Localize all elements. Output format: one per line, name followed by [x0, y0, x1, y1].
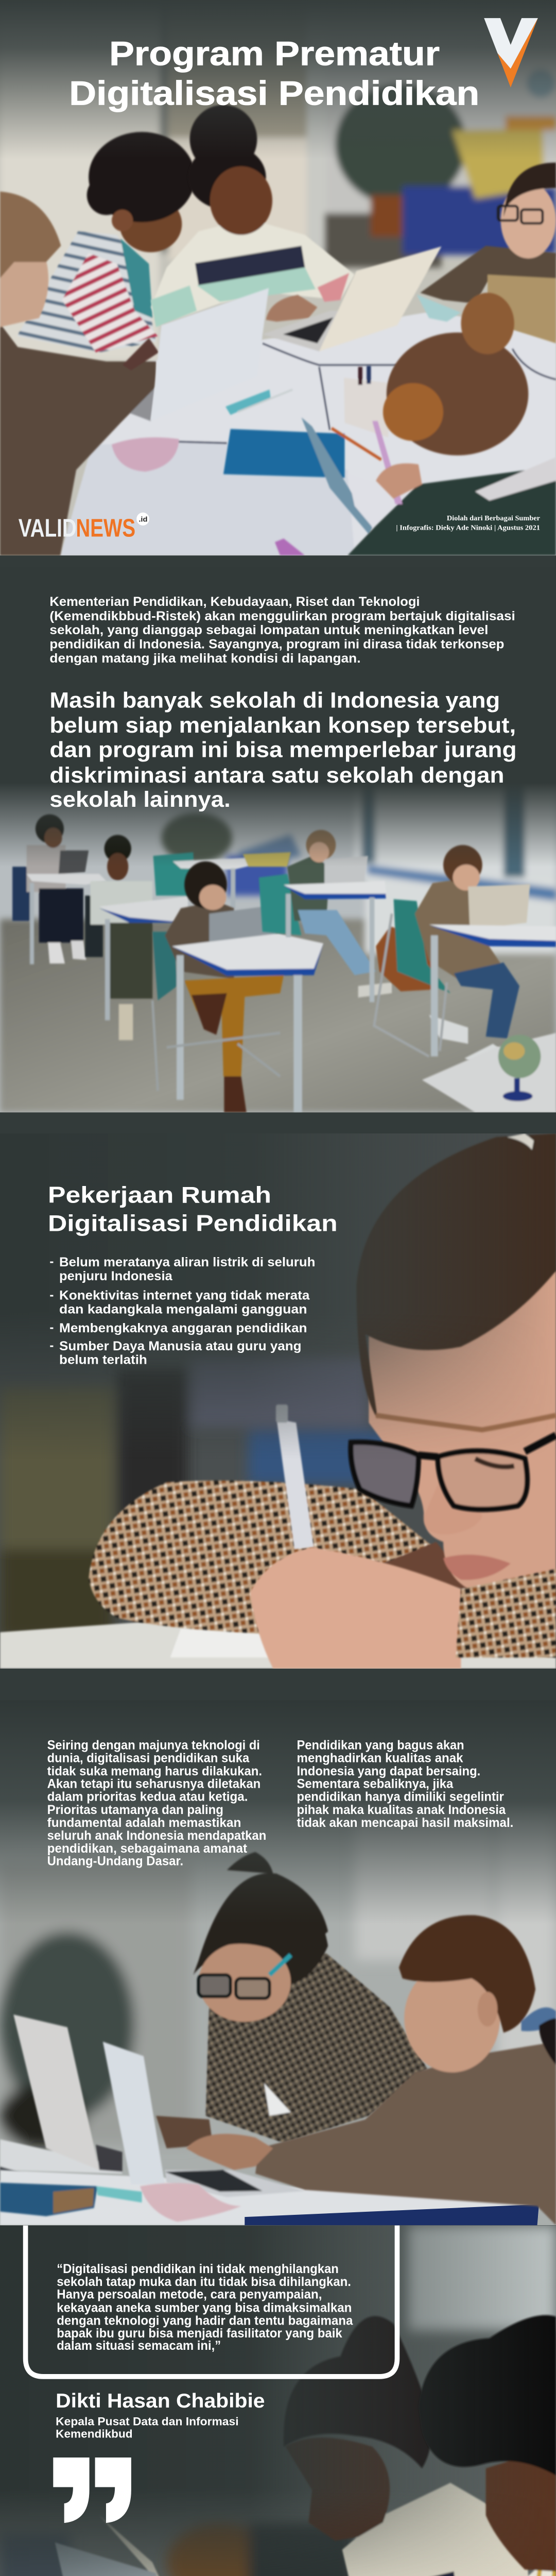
shadow under chin — [383, 1542, 475, 1590]
bullet list: Sumber Daya Manusia atau guru yang — [59, 1340, 301, 1353]
logo: VALIDNEWS.id — [19, 513, 149, 543]
front laptop — [103, 2042, 305, 2197]
left fade overlay — [0, 2226, 556, 2576]
left column text: Prioritas utamanya dan paling — [47, 1803, 223, 1817]
laptops — [55, 2515, 337, 2576]
desk items — [111, 364, 388, 555]
middle right student: girl with laptop — [259, 830, 392, 1002]
hero background room — [0, 54, 556, 361]
girl in striped sweater — [284, 2316, 528, 2576]
classroom background — [0, 675, 556, 1112]
panel: hero classroom photo with title — [0, 0, 556, 555]
hand — [250, 1547, 461, 1669]
left fade overlay — [0, 1133, 556, 1459]
right column text: pendidikan hanya dimiliki segelintir — [297, 1790, 504, 1804]
bullet list: - — [49, 1255, 54, 1269]
intro paragraph: sekolah, yang dianggap sebagai lompatan untuk meningkatkan level — [49, 623, 488, 637]
left column text — [47, 1738, 266, 1869]
credit caption — [396, 515, 540, 532]
panel: quote with students at laptops — [0, 2226, 556, 2576]
left column text: fundamental adalah memastikan — [47, 1816, 241, 1830]
panel: classroom rows and intro text — [0, 567, 556, 1112]
right column text — [297, 1738, 513, 1830]
book, pen, mask — [0, 2183, 241, 2222]
laptop: cream — [263, 246, 442, 351]
bullet list: - — [49, 1338, 54, 1353]
glasses — [351, 1435, 556, 1510]
credit caption: | Infografis: Dieky Ade Ninoki | Agustus 2021 — [396, 524, 540, 532]
bullet list: Konektivitas internet yang tidak merata — [59, 1289, 310, 1303]
intro paragraph: (Kemendikbbud-Ristek) akan menggulirkan program bertajuk digitalisasi — [49, 609, 515, 623]
credit caption: Diolah dari Berbagai Sumber — [447, 515, 540, 522]
key statement — [49, 688, 517, 811]
bullet list: Membengkaknya anggaran pendidikan — [59, 1321, 307, 1335]
bullet list — [49, 1255, 315, 1367]
laptop: silver — [151, 288, 269, 421]
second row student: girl with phone — [85, 835, 188, 1040]
table — [39, 311, 556, 555]
hair — [356, 1133, 556, 1430]
left column text: dalam prioritas kedua atau ketiga. — [47, 1790, 248, 1804]
left column text: dunia, digitalisasi pendidikan suka — [47, 1751, 250, 1766]
heading: Digitalisasi Pendidikan — [48, 1211, 338, 1236]
bullet list: dan kadangkala mengalami gangguan — [59, 1302, 307, 1316]
speaker name: Dikti Hasan Chabibie — [56, 2390, 265, 2412]
quote text: “Digitalisasi pendidikan ini tidak menghilangkan — [57, 2262, 339, 2276]
heading: Pekerjaan Rumah — [48, 1182, 271, 1208]
key statement: belum siap menjalankan konsep tersebut, — [49, 713, 516, 737]
top fade overlay — [0, 567, 556, 867]
quote frame — [26, 2226, 397, 2377]
quote text — [57, 2262, 353, 2353]
right column text: pihak maka kualitas anak Indonesia — [297, 1803, 506, 1817]
hero top fade overlay — [0, 0, 556, 159]
key statement: diskriminasi antara satu sekolah dengan — [49, 762, 504, 787]
title: Digitalisasi Pendidikan — [69, 74, 479, 112]
plaid cuff — [456, 1569, 556, 1657]
key statement: Masih banyak sekolah di Indonesia yang — [49, 688, 500, 713]
intro paragraph: pendidikan di Indonesia. Sayangnya, program ini dirasa tidak terkonsep — [49, 637, 504, 652]
right student: girl with laptop and backpack — [374, 845, 556, 1062]
logo: VALIDNEWS.id: NEWS — [76, 514, 135, 543]
left column text: Akan tetapi itu seharusnya diletakan — [47, 1777, 260, 1791]
left column text: pendidikan, sebagaimana amanat — [47, 1842, 247, 1856]
girl with striped sweater — [151, 105, 355, 327]
bullet list: - — [49, 1288, 54, 1302]
right column text: tidak akan mencapai hasil maksimal. — [297, 1816, 513, 1830]
plaid arm — [89, 1481, 436, 1634]
panel: two students and two-column text — [0, 1700, 556, 2225]
right column text: menghadirkan kualitas anak — [297, 1751, 463, 1766]
back row student: boy with tablet — [12, 815, 107, 964]
table and paper — [0, 1620, 556, 1669]
quote text: dalam situasi semacam ini,” — [57, 2339, 221, 2353]
face — [369, 1271, 556, 1589]
bullet list: Belum meratanya aliran listrik di seluruh — [59, 1256, 315, 1269]
key statement: dan program ini bisa memperlebar jurang — [49, 737, 517, 762]
panel: girl writing and homework list — [0, 1133, 556, 1669]
back desk and teal chair — [153, 852, 291, 908]
quote text: bapak ibu guru bisa menjadi fasilitator yang baik — [57, 2327, 342, 2341]
quote text: kekayaan aneka sumber yang bisa dimaksimalkan — [57, 2301, 352, 2315]
bullet list: penjuru Indonesia — [59, 1269, 172, 1283]
intro paragraph: dengan matang jika melihat kondisi di lapangan. — [49, 652, 361, 666]
heading — [48, 1182, 338, 1236]
table — [0, 2170, 539, 2225]
center student: boy with glasses — [152, 861, 323, 1112]
speaker role — [56, 2415, 239, 2440]
boy in striped shirt — [276, 2315, 556, 2576]
pen — [276, 1404, 314, 1549]
logo: VALIDNEWS.id: VALID — [19, 514, 77, 543]
table edge — [245, 2205, 539, 2225]
left column text: Undang-Undang Dasar. — [47, 1854, 183, 1869]
right column text: Sementara sebaliknya, jika — [297, 1777, 454, 1791]
bullet list: belum terlatih — [59, 1353, 147, 1367]
left column text: Seiring dengan majunya teknologi di — [47, 1738, 260, 1752]
blurred background — [0, 2226, 556, 2576]
right column text: Indonesia yang dapat bersaing. — [297, 1765, 480, 1778]
boy with striped shirt — [17, 132, 195, 352]
left column text: tidak suka memang harus dilakukan. — [47, 1765, 262, 1778]
icon: V logo — [484, 18, 538, 88]
speaker role: Kepala Pusat Data dan Informasi — [56, 2415, 239, 2428]
title: Program Prematur — [109, 35, 440, 72]
key statement: sekolah lainnya. — [49, 787, 231, 811]
front table with globe — [422, 1033, 556, 1112]
bullet list: - — [49, 1320, 54, 1334]
top fade overlay — [0, 1700, 556, 1924]
blurred background — [0, 1358, 390, 1639]
speaker role: Kemendikbud — [56, 2427, 133, 2440]
intro paragraph — [49, 595, 515, 666]
right boy with glasses — [416, 163, 556, 343]
quote text: sekolah tatap muka dan itu tidak bisa dihilangkan. — [57, 2275, 351, 2289]
girl in foreground — [348, 293, 556, 555]
girl with ponytail — [186, 1915, 556, 2225]
icon: closing quotation marks — [53, 2458, 131, 2523]
right column text: Pendidikan yang bagus akan — [297, 1738, 464, 1752]
boy leaning over — [156, 1852, 427, 2148]
intro paragraph: Kementerian Pendidikan, Kebudayaan, Riset dan Teknologi — [49, 595, 420, 609]
quote text: Hanya persoalan metode, cara penyampaian, — [57, 2287, 322, 2301]
left girl in brown blouse — [0, 192, 159, 555]
title — [69, 35, 479, 112]
logo: VALIDNEWS.id: .id — [138, 515, 148, 523]
left column text: seluruh anak Indonesia mendapatkan — [47, 1829, 266, 1843]
laptops — [0, 2014, 123, 2183]
quote text: dengan teknologi yang hadir dan tentu bagaimana — [57, 2314, 353, 2328]
blurred background — [0, 1808, 556, 2148]
